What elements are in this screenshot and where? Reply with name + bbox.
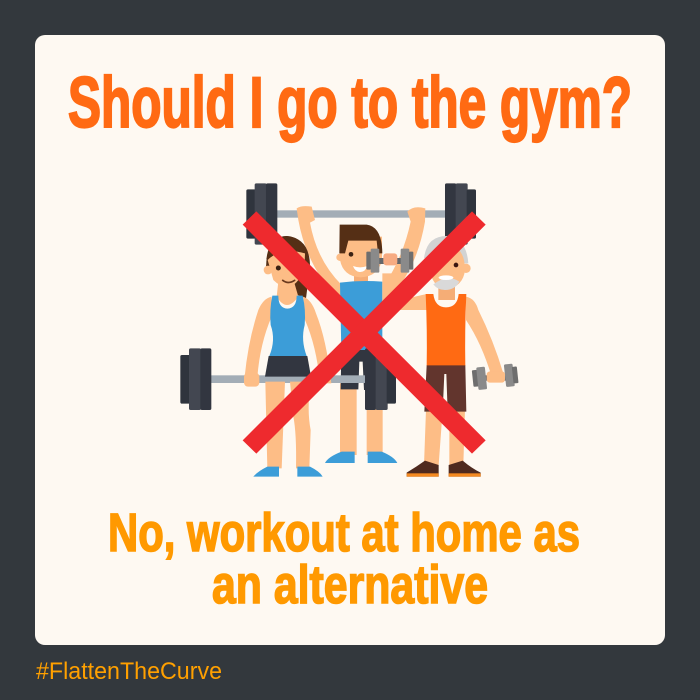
- curl arm: [382, 273, 403, 303]
- legs: [340, 383, 357, 455]
- hair back: [266, 236, 310, 298]
- barbell: front, held by woman: [180, 348, 396, 410]
- shoes: [325, 452, 355, 463]
- panel: card: [35, 35, 665, 645]
- figure: man in centre: [297, 206, 425, 463]
- head: [268, 251, 305, 287]
- answer text: No, workout at home as: [108, 503, 580, 563]
- shorts: [424, 365, 466, 412]
- eye: [454, 263, 458, 267]
- figure: older man: [400, 236, 519, 477]
- raised arms: [297, 206, 342, 302]
- figure: woman: [244, 236, 331, 477]
- hair: [339, 225, 382, 253]
- answer text: [108, 503, 580, 615]
- neck: [438, 285, 455, 300]
- neck: [354, 270, 368, 287]
- arm on friend: [400, 294, 427, 310]
- hair: [424, 236, 468, 263]
- shoes: [407, 461, 439, 477]
- shorts: [341, 350, 377, 390]
- eyes and smile: [349, 252, 353, 257]
- face: [276, 265, 281, 270]
- legs: [265, 382, 285, 468]
- barbell: overhead: [246, 183, 476, 245]
- neck and chest: [277, 282, 298, 305]
- dumbbell: [472, 364, 519, 390]
- illustration: three people lifting weights, crossed out: [180, 183, 519, 477]
- shoes: [253, 467, 279, 477]
- hair front: [266, 236, 307, 265]
- arms: [245, 297, 272, 377]
- dumbbell: [366, 249, 413, 273]
- head: [430, 245, 465, 290]
- icon: red cross: [243, 211, 486, 454]
- grip: [244, 373, 259, 387]
- top: [269, 296, 307, 356]
- shirt: [340, 281, 382, 352]
- answer text: an alternative: [212, 555, 488, 615]
- beard: [433, 278, 459, 290]
- shorts: [265, 356, 311, 377]
- hashtag footer: #FlattenTheCurve: [36, 658, 222, 685]
- singlet: [426, 294, 466, 366]
- right arm: [466, 297, 503, 377]
- legs: [424, 410, 443, 465]
- head: [340, 237, 382, 277]
